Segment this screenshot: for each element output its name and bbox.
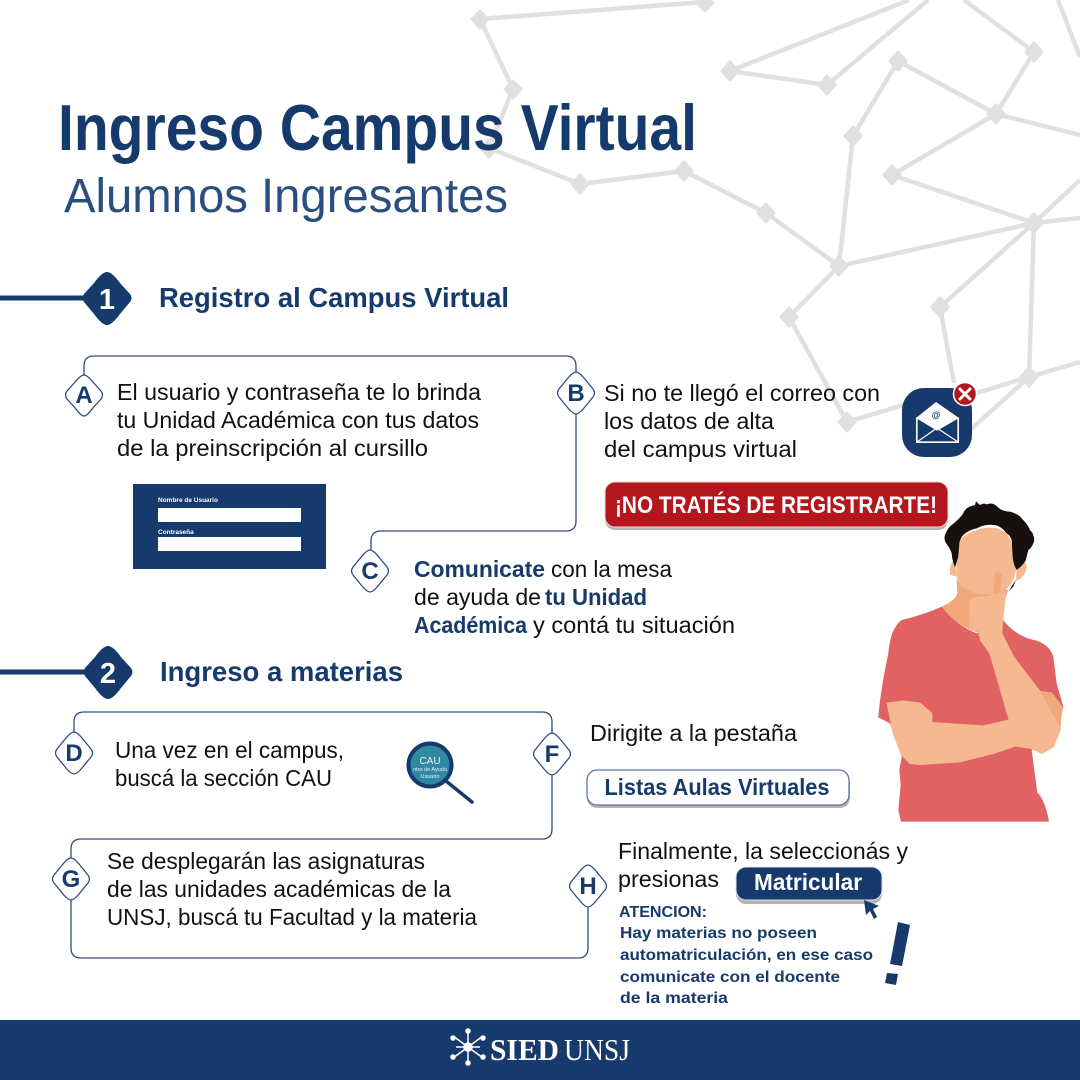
step H: presionas (618, 866, 719, 892)
step C: Comunicate (414, 556, 545, 582)
step A: tu Unidad Académica con tus datos (117, 407, 479, 433)
attention note: ATENCION: (619, 904, 707, 921)
step C: y contá tu situación (533, 612, 735, 638)
illustration: thinking person (878, 501, 1063, 822)
step C (352, 550, 735, 638)
diamond C: C (361, 558, 379, 585)
diamond D: D (65, 740, 83, 767)
footer logo: SIED (490, 1032, 559, 1067)
footer logo: UNSJ (564, 1032, 630, 1067)
step B: los datos de alta (604, 408, 774, 434)
step H (570, 838, 910, 1007)
warning button (605, 482, 948, 530)
icon: CAU magnifier (408, 744, 472, 802)
diamond B (558, 372, 594, 414)
attention note: comunicate con el docente (620, 969, 840, 986)
connector lines: section 2 (71, 712, 588, 958)
title: Alumnos Ingresantes (64, 170, 508, 223)
enroll button (736, 867, 882, 904)
step H: Finalmente, la seleccionás y (618, 838, 908, 864)
finger shading and elbow (993, 571, 1002, 594)
step C: tu Unidad (545, 584, 647, 610)
tab button: Listas Aulas Virtuales (604, 774, 830, 800)
footer logo (451, 1029, 630, 1067)
icon: CAU magnifier: ntro de Ayuda (413, 767, 448, 773)
step A: El usuario y contraseña te lo brinda (117, 379, 481, 405)
background network pattern (472, 0, 1080, 432)
arms and hand (887, 571, 1062, 764)
step C: de ayuda de (414, 584, 541, 610)
diamond D (56, 732, 92, 774)
step B (558, 372, 880, 462)
login form illustration: Nombre de Usuario (158, 497, 218, 504)
attention note: automatriculación, en ese caso (620, 947, 873, 964)
step C: con la mesa (551, 556, 672, 582)
shirt (878, 607, 1063, 822)
diamond H (570, 865, 606, 907)
step A: de la preinscripción al cursillo (117, 435, 428, 461)
step B: Si no te llegó el correo con (604, 380, 880, 406)
number badge 2 (84, 646, 132, 699)
step D: buscá la sección CAU (115, 765, 332, 791)
diamond F: F (545, 741, 559, 768)
number badge 1 (82, 272, 132, 325)
login form illustration (133, 484, 326, 569)
step C: Académica (414, 612, 527, 638)
step D (56, 732, 344, 791)
step A (66, 375, 481, 461)
icon: CAU magnifier: Usuario (421, 774, 439, 780)
warning button: ¡NO TRATÉS DE REGISTRARTE! (615, 491, 937, 519)
icon: cursor (864, 900, 879, 919)
tab button (587, 770, 850, 808)
section 2 heading (0, 646, 403, 699)
connector lines: section 1 (84, 356, 576, 552)
diamond G (52, 858, 90, 900)
enroll button: Matricular (754, 869, 862, 895)
step G: UNSJ, buscá tu Facultad y la materia (107, 904, 477, 930)
neck (942, 580, 1008, 633)
diamond F (534, 733, 570, 775)
title: Ingreso Campus Virtual (58, 91, 697, 164)
hair (945, 501, 1034, 592)
step D: Una vez en el campus, (115, 737, 344, 763)
footer band (0, 1020, 1080, 1080)
diamond G: G (62, 866, 80, 893)
icon: exclamation mark (885, 922, 910, 985)
section 1 heading (0, 272, 509, 325)
attention note: Hay materias no poseen (620, 925, 817, 942)
diamond C (352, 550, 388, 592)
login form illustration: Contraseña (158, 529, 194, 536)
icon: email with error badge: @ (932, 410, 941, 420)
diamond A: A (75, 382, 93, 409)
section 1 heading: Registro al Campus Virtual (159, 282, 509, 313)
step G (52, 848, 477, 930)
step G: de las unidades académicas de la (107, 876, 451, 902)
section 2 heading: Ingreso a materias (160, 656, 403, 687)
title (58, 91, 697, 223)
attention note (619, 904, 873, 1007)
icon: CAU magnifier: CAU (419, 756, 441, 767)
step F: Dirigite a la pestaña (590, 720, 797, 746)
step B: del campus virtual (604, 436, 797, 462)
ears and face (950, 560, 1026, 581)
number badge 1: 1 (99, 284, 115, 316)
step G: Se desplegarán las asignaturas (107, 848, 425, 874)
diamond B: B (567, 380, 585, 407)
diamond H: H (579, 873, 597, 900)
step F (534, 720, 850, 808)
attention note: de la materia (620, 990, 728, 1007)
icon: email with error badge (902, 382, 976, 457)
diamond A (66, 375, 102, 416)
number badge 2: 2 (100, 658, 116, 690)
